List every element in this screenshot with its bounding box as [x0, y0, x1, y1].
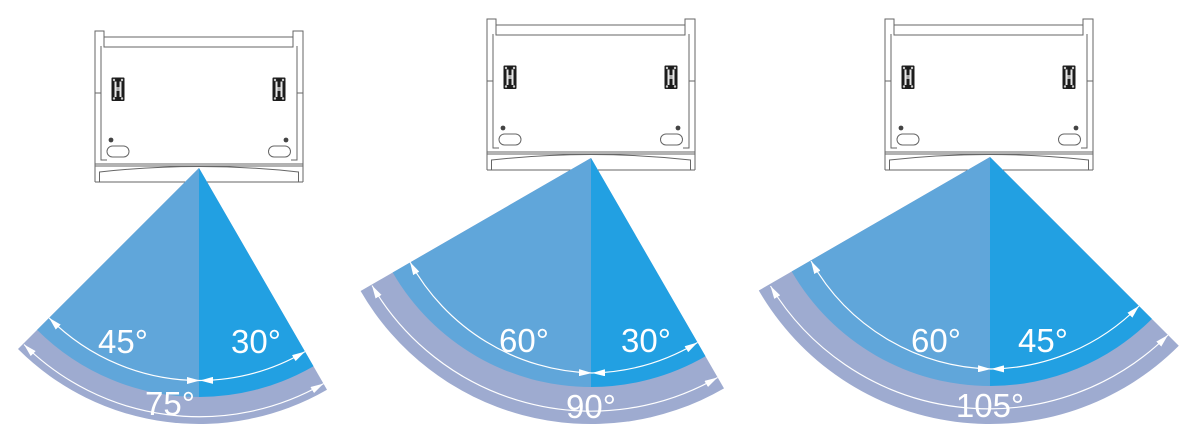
- arrow: 75 degree span: [24, 344, 324, 417]
- speaker drawing: 75 degree: [95, 31, 303, 182]
- label: 60 degrees: 60°: [911, 322, 961, 359]
- label: 60 degrees: 60°: [499, 322, 549, 359]
- label: 75 degrees: 75°: [145, 385, 195, 422]
- label: 30 degrees: 30°: [621, 322, 671, 359]
- arrow: 30 degree span: [592, 342, 698, 373]
- panel: 90 degree coverage: [361, 19, 724, 425]
- speaker drawing: 105 degree: [885, 19, 1093, 170]
- sector: 60 degree left: [792, 157, 990, 386]
- label: 105 degrees: 105°: [956, 387, 1024, 424]
- arrow: 60 degree span: [811, 261, 991, 369]
- sector: 105 degree total band: [759, 157, 1179, 424]
- label: 45 degrees: 45°: [1018, 322, 1068, 359]
- sector: 45 degree right: [990, 157, 1152, 386]
- arrow: 45 degree span: [49, 318, 200, 381]
- sector: 90 degree total band: [361, 158, 724, 424]
- sector: 75 degree total band: [18, 168, 327, 424]
- sector: 30 degree right: [199, 168, 314, 397]
- arrow: 30 degree span: [200, 352, 305, 380]
- label: 90 degrees: 90°: [566, 388, 616, 425]
- sector: 30 degree right: [591, 158, 706, 387]
- arrow: 105 degree span: [770, 286, 1168, 409]
- sector: 60 degree left: [393, 158, 591, 387]
- arrow: 90 degree span: [372, 286, 718, 411]
- speaker drawing: 90 degree: [487, 19, 695, 170]
- sector: 45 degree left: [37, 168, 199, 397]
- arrow: 60 degree span: [410, 262, 592, 373]
- arrow: 45 degree span: [991, 306, 1139, 369]
- panel: 75 degree coverage: [18, 31, 327, 424]
- label: 45 degrees: 45°: [98, 323, 148, 360]
- panel: 105 degree coverage: [759, 19, 1179, 424]
- label: 30 degrees: 30°: [231, 323, 281, 360]
